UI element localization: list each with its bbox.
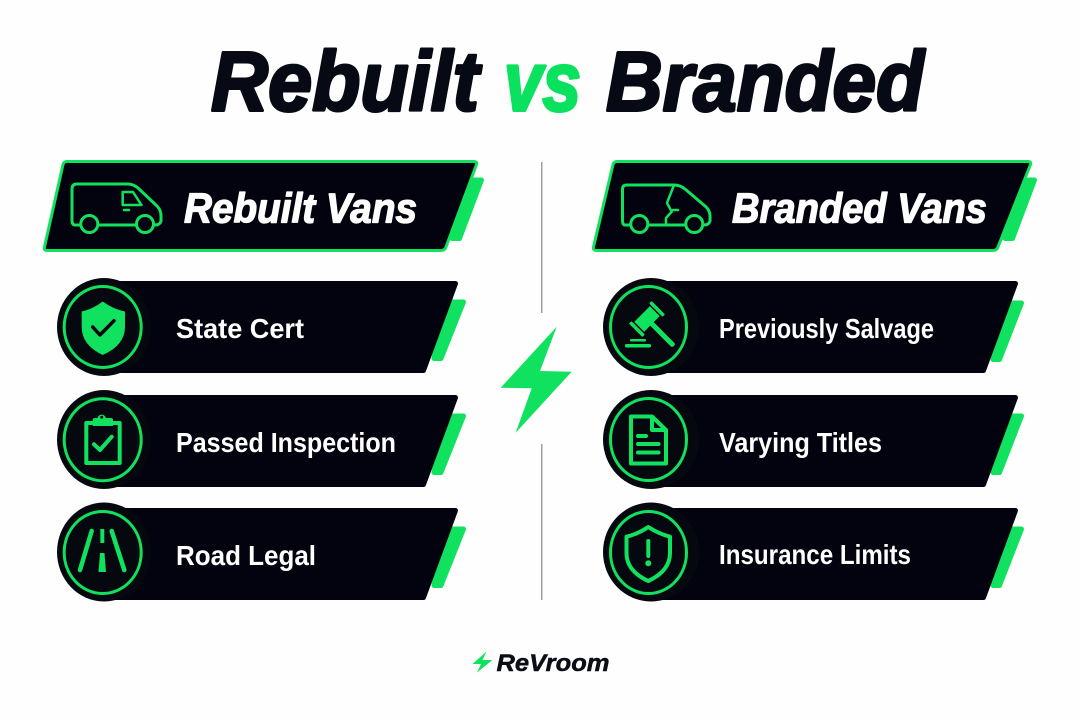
icon: center lightning bolt (501, 327, 572, 433)
icon: logo bolt (472, 652, 492, 672)
panel: rebuilt header (44, 162, 482, 250)
panel: branded row, insurance limits (603, 502, 1022, 602)
center divider: upper (541, 162, 542, 313)
icon: clipboard with check (86, 415, 120, 463)
row label: State Cert (176, 313, 304, 344)
header label: Rebuilt Vans (184, 184, 417, 232)
panel: branded header (593, 162, 1034, 250)
title: Branded (606, 34, 926, 128)
title: Rebuilt (211, 34, 482, 128)
title: vs (504, 34, 581, 128)
row label: Road Legal (176, 540, 316, 571)
icon: shield with check (82, 302, 125, 355)
panel: rebuilt row, road legal (57, 502, 464, 602)
icon: road (80, 529, 124, 572)
icon: van (72, 184, 161, 232)
icon: document (631, 416, 666, 464)
icon: shield with exclamation (626, 527, 670, 581)
icon: damaged van (622, 185, 710, 232)
panel: rebuilt row, passed inspection (57, 390, 464, 489)
row label: Passed Inspection (176, 427, 396, 458)
row label: Varying Titles (719, 427, 882, 458)
panel: branded row, previously salvage (603, 278, 1022, 376)
logo wordmark: ReVroom (496, 650, 610, 677)
logo (472, 650, 610, 677)
title (211, 34, 926, 128)
row label: Insurance Limits (719, 539, 911, 570)
header label: Branded Vans (732, 184, 987, 232)
row label: Previously Salvage (719, 313, 934, 344)
center divider: lower (541, 444, 542, 600)
icon: gavel (625, 301, 685, 357)
panel: rebuilt row, state cert (57, 278, 464, 376)
panel: branded row, varying titles (603, 390, 1022, 489)
